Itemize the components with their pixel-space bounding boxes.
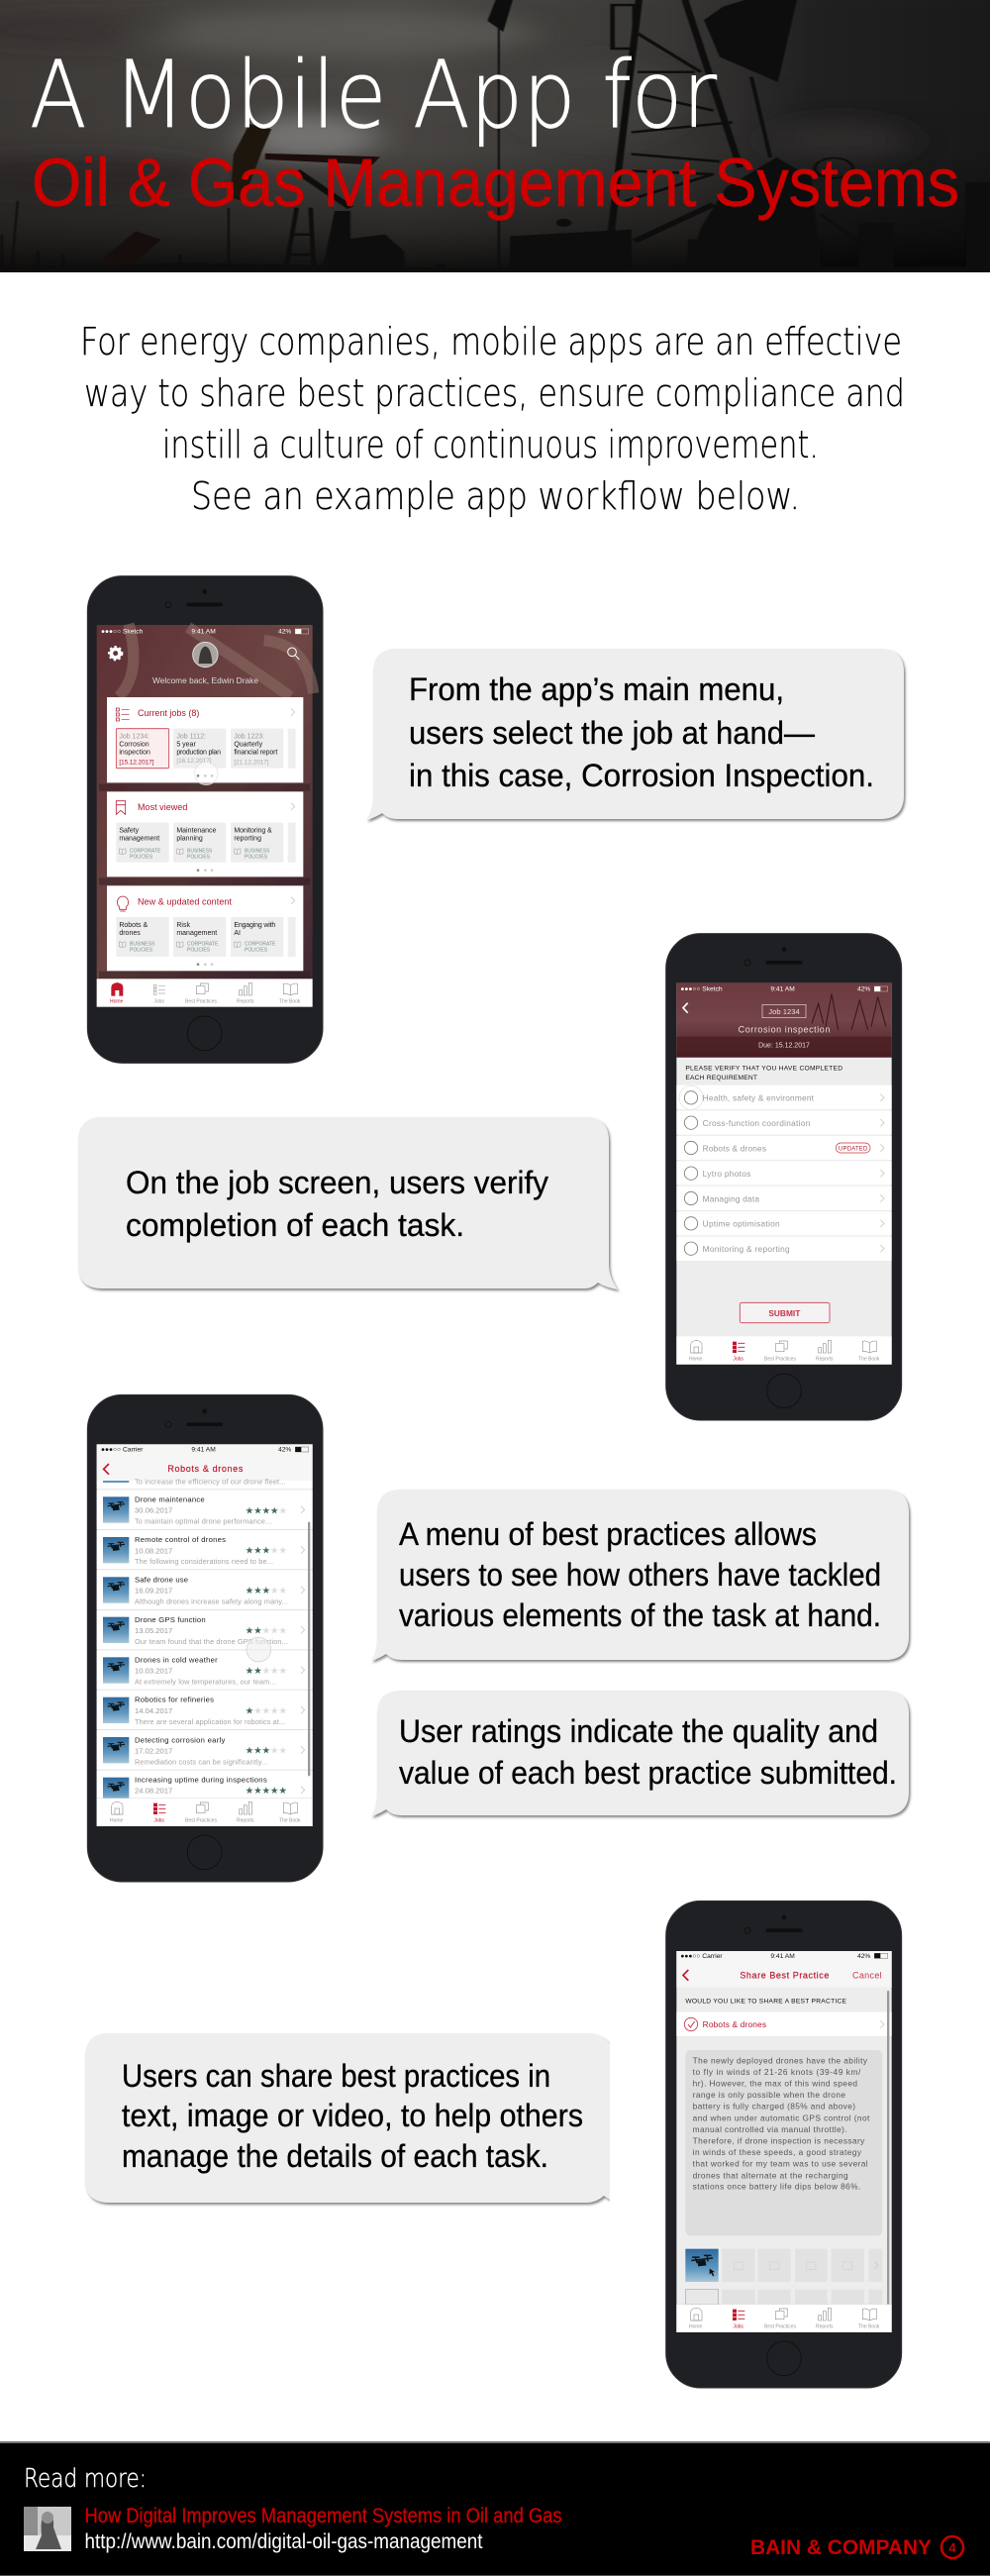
navigation bar: Robots & drones <box>167 1464 244 1474</box>
card: most viewed <box>107 791 303 876</box>
tab bar: Jobs <box>153 1817 164 1823</box>
practice text box: battery is fully charged (85% and above) <box>693 2102 855 2112</box>
section heading: WOULD YOU LIKE TO SHARE A BEST PRACTICE <box>685 1999 847 2006</box>
icon: search <box>288 648 299 660</box>
tab bar: The Book <box>279 998 301 1004</box>
tab bar: Reports <box>816 1356 834 1362</box>
intro text: instill a culture of continuous improvement. <box>162 423 819 466</box>
tab bar: Jobs <box>733 1356 743 1362</box>
card: current jobs: inspection <box>119 749 150 756</box>
card: most viewed: Most viewed <box>138 802 187 812</box>
tab bar: Best Practices <box>185 1817 217 1823</box>
callout: job screen: On the job screen, users verify <box>126 1165 548 1200</box>
screen <box>97 1444 313 1826</box>
card: current jobs: Job 1112: <box>176 733 206 740</box>
row: Increasing uptime during inspections: Increasing uptime during inspections <box>135 1776 267 1785</box>
practice text box: that worked for my team was to use several <box>693 2159 868 2169</box>
callout: share best practices: text, image or video, to help others <box>122 2098 583 2133</box>
row: Safe drone use <box>97 1570 313 1609</box>
navigation bar: Share Best Practice <box>740 1970 829 1980</box>
tab bar: Best Practices <box>185 998 217 1004</box>
navigation bar: 9:41 AM <box>770 1953 795 1960</box>
partial row: To increase the efficiency of our drone fleet... <box>135 1478 286 1487</box>
card: new and updated content: management <box>176 930 217 937</box>
card: most viewed: BUSINESS <box>245 848 270 854</box>
checklist rows: Lytro photos <box>703 1169 750 1179</box>
icon: derrick and pump silhouettes <box>0 0 990 272</box>
tab bar: Best Practices <box>764 2323 796 2329</box>
card: current jobs: financial report <box>234 749 277 756</box>
card: most viewed: BUSINESS <box>187 848 213 854</box>
row: Drone maintenance: ★★★★★ <box>246 1505 287 1516</box>
selected category row <box>676 2012 892 2036</box>
practice text box: to fly in winds of 21-26 knots (39-49 km/ <box>693 2067 861 2077</box>
card: new and updated content: CORPORATE <box>245 941 276 947</box>
checklist rows: UPDATED <box>839 1146 868 1152</box>
status bar: 9:41 AM <box>191 629 216 636</box>
tab bar: Jobs <box>733 2323 743 2329</box>
scrollbar <box>887 1991 889 2315</box>
phone 2: job screen <box>665 933 903 1420</box>
title line: A Mobile App for: A Mobile App for <box>30 42 717 150</box>
image attachment slots <box>685 2249 882 2305</box>
callout: menu of best practices <box>371 1490 913 1664</box>
phone 3: best practices list <box>87 1394 323 1882</box>
practice text box: range is only possible when the drone <box>693 2090 845 2100</box>
card: new and updated content: CORPORATE <box>187 941 219 947</box>
header banner: oil field photo <box>0 0 990 272</box>
card: most viewed: Monitoring & <box>234 828 272 835</box>
checklist rows: Cross-function coordination <box>703 1118 811 1128</box>
callout: job screen <box>77 1117 620 1293</box>
callout: main menu: From the app’s main menu, <box>409 671 784 707</box>
tab bar: Reports <box>237 1817 254 1823</box>
card: new and updated content: AI <box>234 930 241 937</box>
logo: Bain &amp; Company: 4 <box>948 2540 956 2555</box>
card: most viewed: POLICIES <box>245 855 268 861</box>
card: most viewed: planning <box>176 836 203 843</box>
callout: user ratings: User ratings indicate the quality and <box>399 1713 878 1749</box>
logo: Bain &amp; Company: BAIN & COMPANY <box>750 2536 932 2559</box>
callout: menu of best practices: A menu of best practices allows <box>399 1516 817 1552</box>
icon: settings gear <box>109 647 122 660</box>
practice text box: in winds of these speeds, a good strategy <box>693 2147 862 2157</box>
card: new and updated content: POLICIES <box>187 948 211 954</box>
row: Robotics for refineries: ★★★★★ <box>246 1705 287 1716</box>
checklist heading: PLEASE VERIFY THAT YOU HAVE COMPLETED <box>685 1066 842 1073</box>
card: current jobs: [21.12.2017] <box>234 759 269 766</box>
tab bar: Home <box>110 998 124 1004</box>
practice text box: Therefore, if drone inspection is necessary <box>693 2135 865 2145</box>
checklist heading <box>685 1066 842 1082</box>
practice text box: The newly deployed drones have the ability <box>693 2055 868 2065</box>
row: Drones in cold weather <box>97 1650 313 1690</box>
touch indicator <box>247 1637 271 1662</box>
row: Drone GPS function: 13.05.2017 <box>135 1626 172 1635</box>
row: Drones in cold weather: ★★★★★ <box>246 1666 287 1677</box>
screen <box>97 624 314 1007</box>
article link title: How Digital Improves Management Systems in Oil and Gas <box>85 2505 562 2527</box>
intro text <box>80 320 905 518</box>
checklist rows <box>676 1085 892 1261</box>
row: Drones in cold weather: 10.03.2017 <box>135 1667 172 1676</box>
row: Remote control of drones <box>97 1530 313 1569</box>
tab bar: Best Practices <box>764 1356 796 1362</box>
row: Robotics for refineries: There are several application for robotics at... <box>135 1717 285 1726</box>
row: Remote control of drones: 10.08.2017 <box>135 1546 172 1555</box>
tab bar <box>676 1336 892 1365</box>
navigation bar: 9:41 AM <box>191 1447 216 1454</box>
card: most viewed: management <box>119 836 159 843</box>
card: current jobs <box>107 697 303 785</box>
navigation bar: ●●●○○ Carrier <box>101 1447 144 1454</box>
row: Robotics for refineries <box>97 1691 313 1729</box>
callout: job screen: completion of each task. <box>126 1207 464 1243</box>
screen <box>676 983 892 1365</box>
checklist rows: Monitoring & reporting <box>703 1244 790 1254</box>
phone body <box>666 1901 902 2388</box>
icon: user avatar <box>193 642 218 668</box>
submit button: SUBMIT <box>768 1308 800 1318</box>
callout: menu of best practices: various elements of the task at hand. <box>399 1597 881 1633</box>
tab bar <box>97 1799 313 1826</box>
callout: user ratings: value of each best practice submitted. <box>399 1755 897 1791</box>
welcome text: Welcome back, Edwin Drake <box>152 675 258 685</box>
row: Safe drone use: Although drones increase safety along many... <box>135 1597 288 1606</box>
callout: main menu <box>366 649 907 823</box>
navigation bar: 42% <box>857 1953 870 1960</box>
footer <box>0 2441 990 2576</box>
partial row <box>97 1478 313 1489</box>
row: Drone GPS function: Our team found that the drone GPS function... <box>135 1637 288 1646</box>
job header image: Corrosion inspection <box>739 1025 830 1035</box>
card: current jobs: 5 year <box>176 741 196 748</box>
callout: main menu: users select the job at hand— <box>409 715 815 751</box>
row: Safe drone use: ★★★★★ <box>246 1586 287 1597</box>
tab bar: Home <box>110 1817 124 1823</box>
callout: menu of best practices: users to see how others have tackled <box>399 1557 881 1593</box>
callout: share best practices: Users can share best practices in <box>122 2058 550 2094</box>
job header image: 9:41 AM <box>770 986 795 993</box>
card: most viewed: POLICIES <box>130 855 153 861</box>
row: Drone GPS function: ★★★★★ <box>246 1626 287 1637</box>
status bar: 42% <box>278 629 291 636</box>
phone 4: share best practice <box>665 1900 903 2389</box>
tab bar: The Book <box>279 1817 301 1823</box>
card: most viewed: POLICIES <box>187 855 211 861</box>
card: current jobs: [16.12.2017] <box>176 758 212 765</box>
row: Drones in cold weather: At extremely low temperatures, our team... <box>135 1677 276 1686</box>
row: Robotics for refineries: Robotics for refineries <box>135 1696 214 1704</box>
tab bar: Reports <box>237 998 254 1004</box>
screen <box>676 1951 892 2332</box>
article thumbnail <box>24 2507 71 2551</box>
status bar <box>101 629 309 636</box>
read more heading: Read more: <box>24 2464 147 2494</box>
navigation bar: 42% <box>278 1447 291 1454</box>
callout: main menu: in this case, Corrosion Inspection. <box>409 758 874 793</box>
phone 1: main menu <box>87 575 323 1064</box>
card: current jobs: [15.12.2017] <box>119 759 154 766</box>
phone body <box>87 576 323 1063</box>
card: most viewed: Maintenance <box>176 828 217 835</box>
job header image: Job 1234 <box>768 1007 800 1016</box>
job header image: 42% <box>857 986 870 993</box>
card: most viewed: reporting <box>234 836 261 843</box>
job header image: Due: 15.12.2017 <box>758 1042 810 1049</box>
card: new and updated content: Robots & <box>119 922 148 929</box>
navigation bar <box>97 1444 313 1481</box>
job header image <box>676 983 892 1058</box>
row: Detecting corrosion early <box>97 1730 313 1770</box>
row: Drone maintenance: Drone maintenance <box>135 1495 205 1504</box>
row: Safe drone use: 16.09.2017 <box>135 1587 172 1596</box>
callout: share best practices <box>85 2033 610 2207</box>
navigation bar: ●●●○○ Carrier <box>680 1953 723 1960</box>
phone body <box>666 934 902 1420</box>
card: current jobs: production plan <box>176 749 221 756</box>
row: Remote control of drones: Remote control of drones <box>135 1535 226 1544</box>
row: Drone GPS function: Drone GPS function <box>135 1615 206 1624</box>
card: current jobs: Corrosion <box>119 741 149 748</box>
navigation bar <box>676 1951 892 1988</box>
intro text: See an example app workflow below. <box>191 474 800 518</box>
card: current jobs: Job 1234: <box>119 733 149 740</box>
card: current jobs: Quarterly <box>234 741 263 748</box>
selected category row: Robots & drones <box>703 2019 766 2029</box>
tab bar: Home <box>689 2323 703 2329</box>
scrollbar <box>308 1522 310 1776</box>
callout: share best practices: manage the details of each task. <box>122 2138 548 2174</box>
row: Increasing uptime during inspections: ★★★★★ <box>246 1786 287 1797</box>
phone body <box>87 1394 323 1882</box>
card: new and updated content: Risk <box>176 922 190 929</box>
submit button <box>740 1302 830 1323</box>
practice text box: manual controlled via manual throttle). <box>693 2124 847 2134</box>
checklist heading: EACH REQUIREMENT <box>685 1075 757 1082</box>
row: Robotics for refineries: 14.04.2017 <box>135 1706 172 1715</box>
tab bar: Home <box>689 1356 703 1362</box>
row: Remote control of drones: The following considerations need to be... <box>135 1557 273 1566</box>
row: Increasing uptime during inspections: 24.08.2017 <box>135 1787 172 1796</box>
article url: http://www.bain.com/digital-oil-gas-management <box>85 2530 483 2553</box>
navigation bar: Cancel <box>852 1970 882 1980</box>
checklist rows: Uptime optimisation <box>703 1219 780 1229</box>
card: most viewed: CORPORATE <box>130 848 161 854</box>
card: new and updated content: drones <box>119 930 141 937</box>
tab bar <box>676 2305 892 2332</box>
practice text box: hr). However, the max of this wind speed <box>693 2079 857 2089</box>
row: Detecting corrosion early: Remediation costs can be significantly... <box>135 1758 267 1767</box>
tab bar: Jobs <box>153 998 164 1004</box>
card: new and updated content: POLICIES <box>245 948 268 954</box>
status bar: ●●●○○ Sketch <box>101 629 144 636</box>
checklist rows: Health, safety & environment <box>703 1093 815 1103</box>
callout: user ratings <box>371 1691 913 1819</box>
row: Drone maintenance <box>97 1490 313 1529</box>
practice text box: drones that alternate at the recharging <box>693 2170 848 2180</box>
card: current jobs: Current jobs (8) <box>138 708 199 718</box>
row: Remote control of drones: ★★★★★ <box>246 1546 287 1557</box>
row: Drone maintenance: 30.06.2017 <box>135 1506 172 1515</box>
checklist rows: Managing data <box>703 1193 759 1203</box>
job header image: ●●●○○ Sketch <box>680 986 723 993</box>
row: Detecting corrosion early: 17.02.2017 <box>135 1746 172 1755</box>
card: new and updated content: Engaging with <box>234 922 275 929</box>
practice text box: stations once battery life dips below 86%. <box>693 2182 860 2192</box>
card: most viewed: Safety <box>119 828 140 835</box>
tab bar: The Book <box>858 2323 880 2329</box>
row: Detecting corrosion early: ★★★★★ <box>246 1746 287 1757</box>
row: Drone maintenance: To maintain optimal drone performance... <box>135 1517 271 1526</box>
card: new and updated content: POLICIES <box>130 948 153 954</box>
row: Detecting corrosion early: Detecting corrosion early <box>135 1735 226 1744</box>
practice text box: and when under automatic GPS control (not <box>693 2112 870 2122</box>
practice text box <box>685 2050 882 2235</box>
tab bar <box>97 979 313 1007</box>
checklist rows: Robots & drones <box>703 1143 766 1153</box>
card: new and updated content <box>107 885 303 971</box>
row: Drone GPS function <box>97 1610 313 1649</box>
card: current jobs: Job 1223: <box>234 733 264 740</box>
title <box>30 42 959 221</box>
tab bar: The Book <box>858 1356 880 1362</box>
card: new and updated content: New & updated content <box>138 896 232 906</box>
tab bar: Reports <box>816 2323 834 2329</box>
card: new and updated content: BUSINESS <box>130 941 155 947</box>
row: Drones in cold weather: Drones in cold weather <box>135 1655 218 1664</box>
row: Safe drone use: Safe drone use <box>135 1576 188 1585</box>
row: Increasing uptime during inspections <box>97 1771 313 1803</box>
